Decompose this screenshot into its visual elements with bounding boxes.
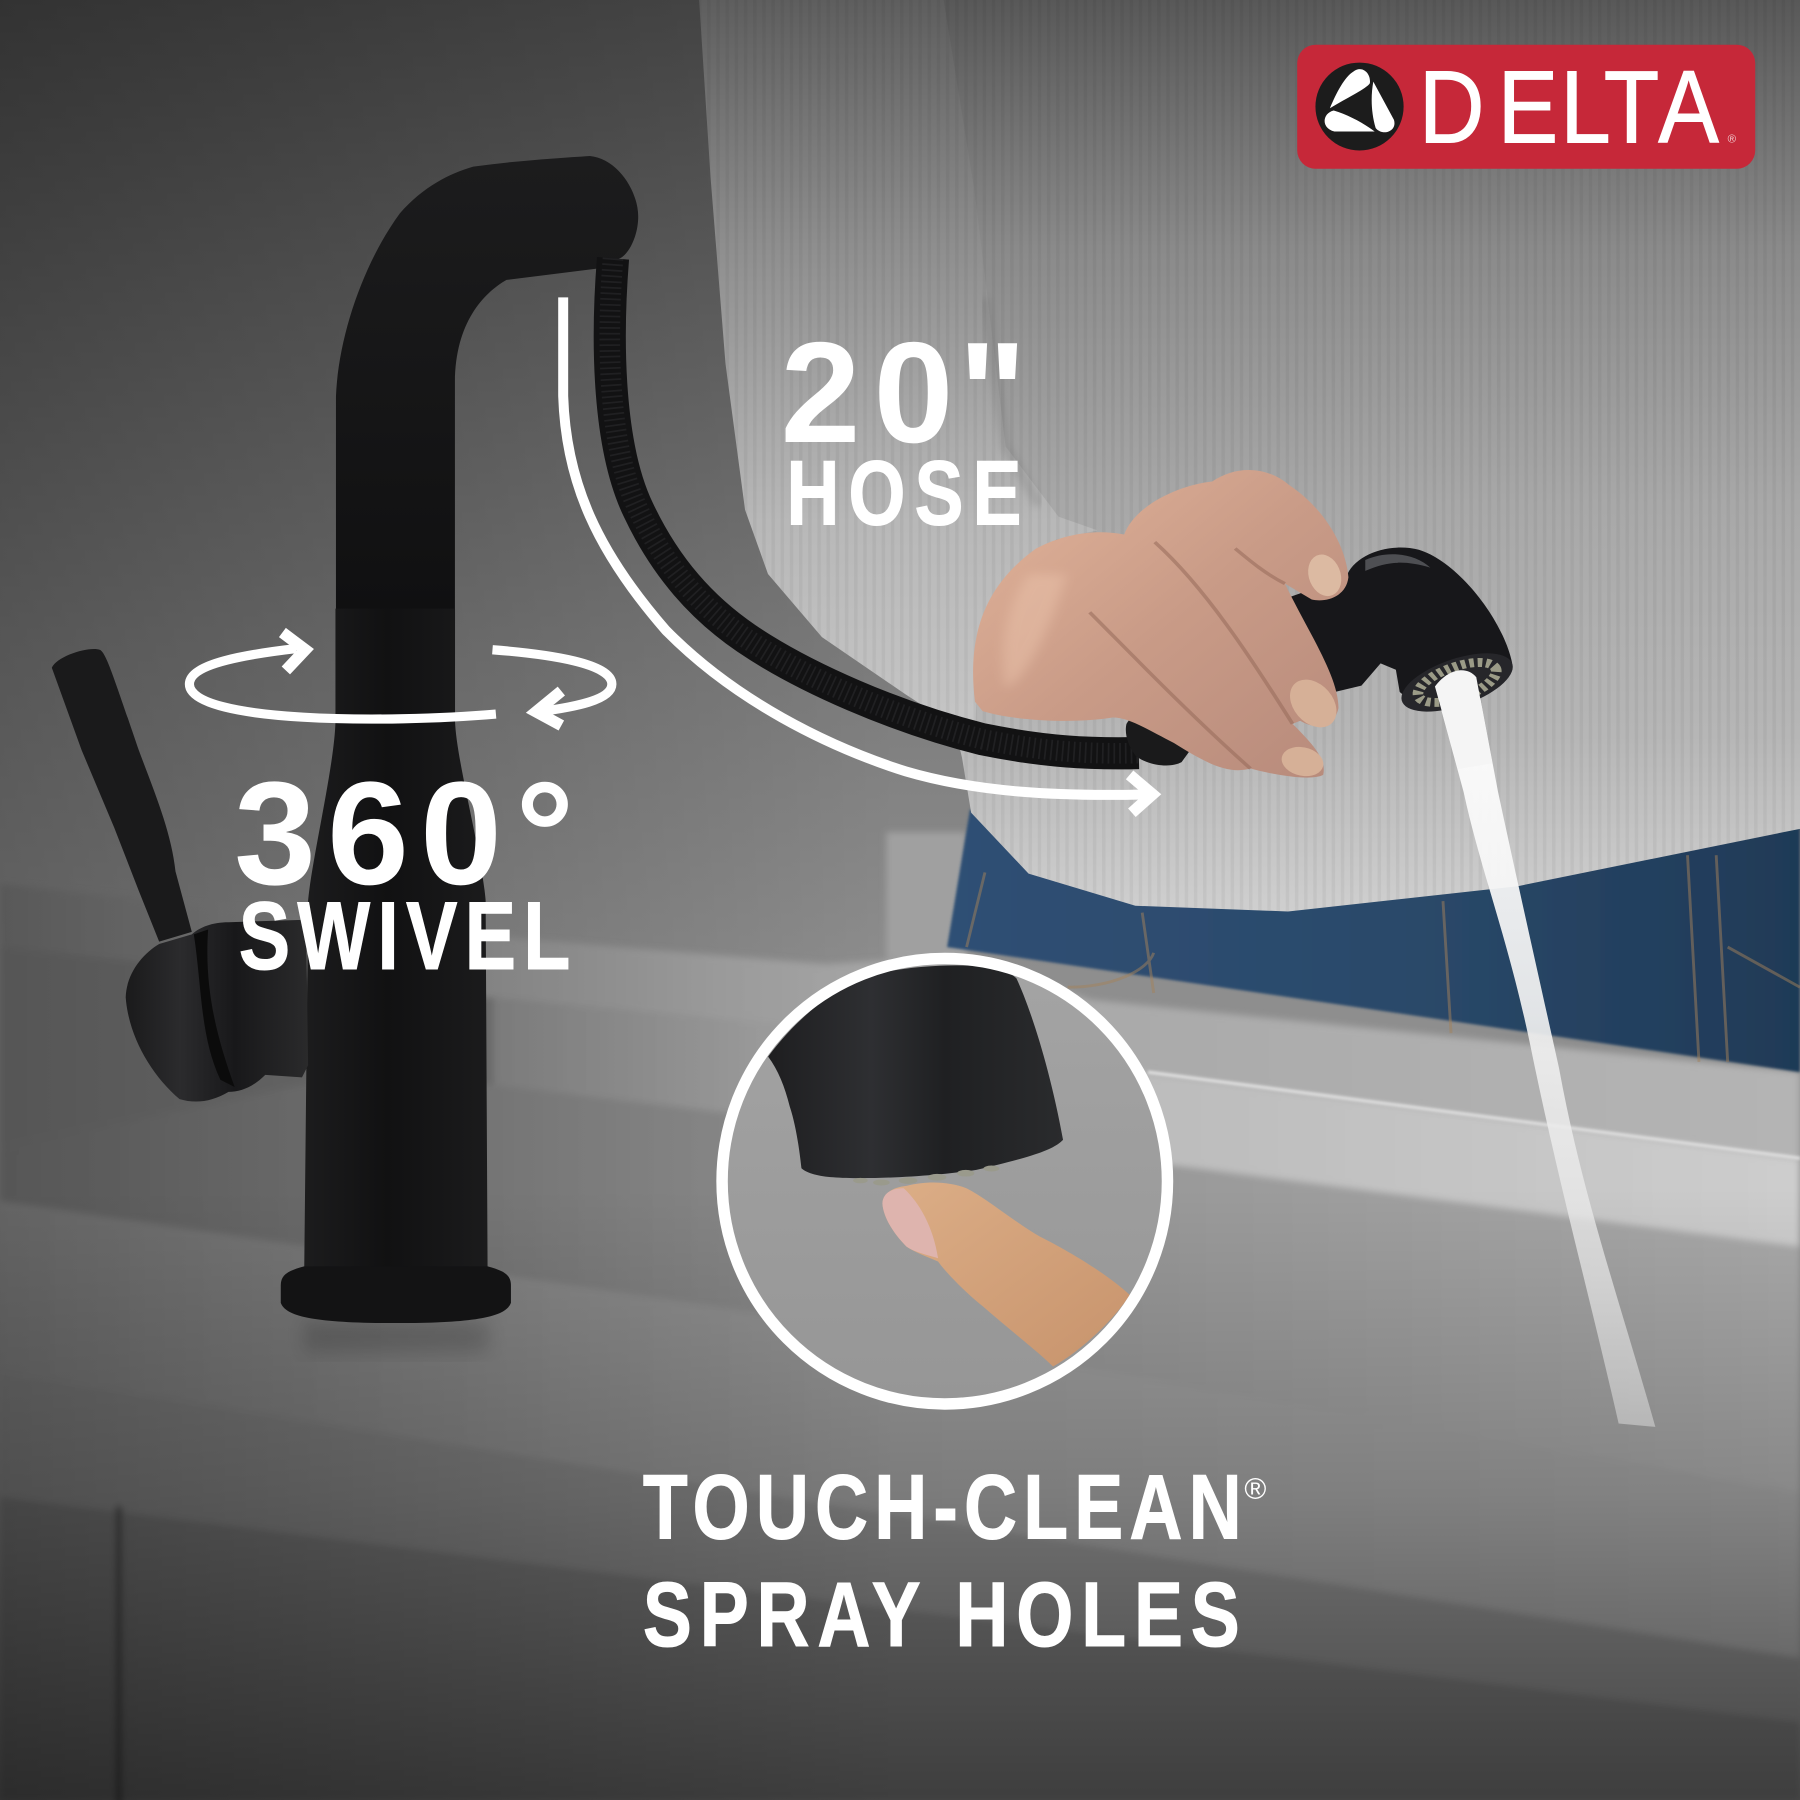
inset spray nozzles bbox=[853, 1166, 999, 1186]
registered mark: ® bbox=[1728, 133, 1737, 145]
label: 360 degree swivel: 360° bbox=[234, 752, 574, 916]
Delta logo bbox=[1297, 45, 1755, 169]
handle knob bbox=[126, 920, 308, 1102]
lever handle bbox=[52, 649, 192, 942]
label: 20 inch hose bbox=[781, 313, 1027, 544]
logo wordmark: DELTA bbox=[1419, 49, 1719, 165]
knuckle highlights bbox=[1003, 574, 1067, 689]
arrow: hose length bbox=[563, 297, 1153, 813]
logo mark bbox=[1315, 63, 1404, 150]
faucet reflection bbox=[304, 1320, 488, 1352]
inset ring bbox=[722, 959, 1167, 1404]
sweater torso bbox=[895, 0, 1800, 911]
water stream over nozzle bbox=[1435, 670, 1492, 769]
faucet bbox=[52, 156, 638, 1323]
arrow: 360 swivel rotation bbox=[189, 633, 612, 726]
inset background bbox=[722, 959, 1167, 1404]
hand bbox=[973, 470, 1348, 778]
pull-out spray head bbox=[1273, 548, 1512, 708]
label: 360 degree swivel: SWIVEL bbox=[239, 882, 570, 990]
label: 360 degree swivel bbox=[234, 752, 574, 990]
heading: touch-clean spray holes: SPRAY HOLES bbox=[643, 1563, 1240, 1666]
faucet spout bbox=[336, 156, 638, 611]
spray head and hand bbox=[973, 470, 1523, 781]
hose bbox=[610, 258, 1139, 753]
jeans bbox=[947, 809, 1800, 1072]
inset circle: touch-clean detail bbox=[722, 959, 1167, 1404]
inset fingertip bbox=[882, 1182, 1130, 1367]
label: 20 inch hose: 20" bbox=[781, 313, 1027, 473]
hose connector bbox=[1126, 714, 1193, 765]
faucet base bbox=[281, 1266, 511, 1323]
fingernails bbox=[1304, 552, 1346, 599]
spray nozzle ring bbox=[1391, 641, 1523, 724]
faucet body bbox=[304, 609, 488, 1288]
water stream bbox=[1435, 670, 1655, 1427]
sweater sleeve bbox=[699, 0, 1097, 735]
heading: touch-clean spray holes bbox=[643, 1455, 1266, 1666]
inset spray head bbox=[768, 965, 1063, 1178]
label: 20 inch hose: HOSE bbox=[786, 442, 1021, 544]
heading: touch-clean spray holes: TOUCH-CLEAN bbox=[643, 1455, 1242, 1558]
heading: touch-clean spray holes: ® bbox=[1244, 1473, 1266, 1506]
